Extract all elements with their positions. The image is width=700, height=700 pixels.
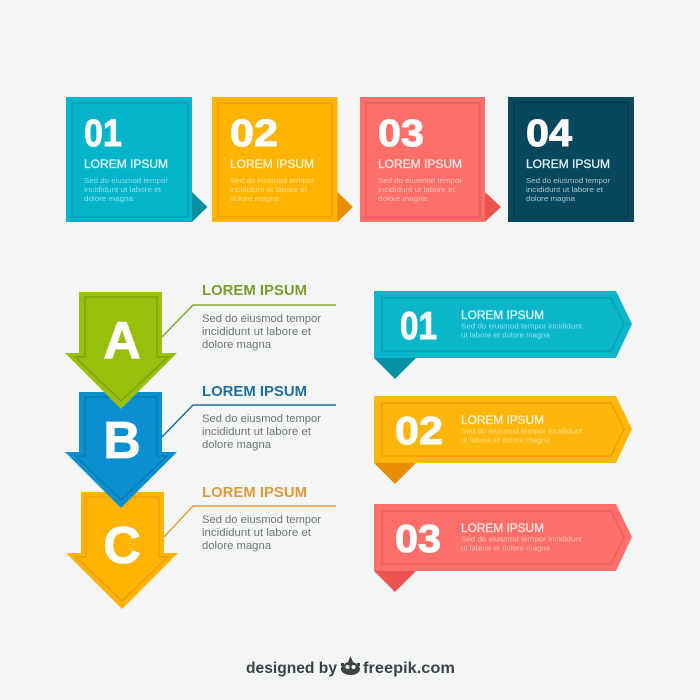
card 04 text: dolore magna	[526, 194, 576, 203]
footer credit	[246, 656, 455, 677]
number 04: 04	[526, 113, 572, 155]
text A: Sed do eiusmod tempor	[202, 313, 321, 325]
number 02: 02	[230, 113, 278, 155]
callout: A	[162, 282, 336, 351]
text A: dolore magna	[202, 339, 272, 351]
letter C: C	[103, 517, 141, 575]
number 03: 03	[378, 113, 424, 155]
heading C: LOREM IPSUM	[202, 484, 307, 501]
panel: card 01	[66, 97, 208, 222]
banner 03 heading: LOREM IPSUM	[461, 521, 544, 535]
banner 03	[374, 504, 632, 592]
arrow: B	[65, 392, 177, 508]
callout: B	[162, 383, 336, 451]
banner 03 text: Sed do eiusmod tempor incididunt	[461, 534, 583, 544]
banner 01 heading: LOREM IPSUM	[461, 308, 544, 322]
text A: incididunt ut labore et	[202, 326, 311, 338]
banner 01 text: Sed do eiusmod tempor incididunt	[461, 322, 583, 330]
text C: incididunt ut labore et	[202, 527, 311, 539]
number 01: 01	[84, 113, 122, 155]
card 04 heading: LOREM IPSUM	[526, 157, 610, 171]
card 01 text	[84, 176, 169, 203]
card 03 text: Sed do eiusmod tempor	[378, 176, 463, 185]
card 02 text	[230, 176, 315, 203]
card 02 text: Sed do eiusmod tempor	[230, 176, 315, 185]
banner 03 text	[461, 534, 583, 552]
panel: card 03	[360, 97, 501, 222]
arrow: A	[65, 292, 177, 409]
card 01 text: incididunt ut labore et	[84, 185, 162, 194]
banner 02 text: ut labore et dolore magna	[461, 436, 551, 444]
card 01 text: Sed do eiusmod tempor	[84, 176, 169, 185]
card 04 text: incididunt ut labore et	[526, 185, 604, 194]
text C: dolore magna	[202, 540, 272, 552]
card 04 text: Sed do eiusmod tempor	[526, 176, 611, 185]
banner 01 text: ut labore et dolore magna	[461, 330, 551, 340]
card 02 text: dolore magna	[230, 194, 280, 203]
text B: dolore magna	[202, 439, 272, 451]
icon: freepik logo	[341, 656, 360, 675]
banner 03 number: 03	[395, 518, 441, 561]
card 03 text: incididunt ut labore et	[378, 185, 456, 194]
card 03 heading: LOREM IPSUM	[378, 157, 462, 171]
panel: card 04	[508, 97, 634, 222]
text C	[202, 514, 321, 552]
callout: C	[164, 484, 336, 552]
banner 02 text: Sed do eiusmod tempor incididunt	[461, 426, 583, 436]
banner 03 text: ut labore et dolore magna	[461, 544, 551, 552]
card 03 text: dolore magna	[378, 194, 428, 203]
banner 02	[374, 396, 632, 484]
panel: card 02	[212, 97, 353, 222]
letter A: A	[103, 312, 141, 370]
connector B	[162, 405, 336, 437]
text A	[202, 313, 321, 351]
connector C	[164, 506, 336, 537]
banner 02 number: 02	[395, 410, 443, 453]
text B	[202, 413, 321, 451]
banner 01 number: 01	[400, 305, 437, 348]
banner 01 text	[461, 322, 583, 340]
card 03 text	[378, 176, 463, 203]
banner 01	[374, 291, 632, 379]
connector A	[162, 305, 336, 337]
letter B: B	[103, 412, 141, 470]
text C: Sed do eiusmod tempor	[202, 514, 321, 526]
text B: Sed do eiusmod tempor	[202, 413, 321, 425]
heading B: LOREM IPSUM	[202, 383, 307, 400]
heading A: LOREM IPSUM	[202, 282, 307, 299]
card 02 text: incididunt ut labore et	[230, 185, 308, 194]
text B: incididunt ut labore et	[202, 426, 311, 438]
designed by: designed by	[246, 660, 337, 677]
card 01 heading: LOREM IPSUM	[84, 157, 168, 171]
card 01 text: dolore magna	[84, 194, 134, 203]
card 02 heading: LOREM IPSUM	[230, 157, 314, 171]
arrow: C	[66, 492, 178, 609]
banner 02 text	[461, 426, 583, 444]
banner 02 heading: LOREM IPSUM	[461, 413, 544, 427]
freepik.com: freepik.com	[363, 660, 455, 677]
card 04 text	[526, 176, 611, 203]
